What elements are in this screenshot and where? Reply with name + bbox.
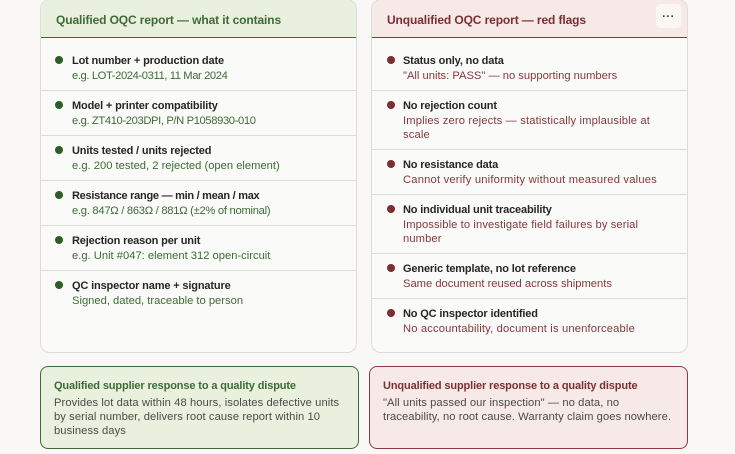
callout: qualified supplier response: Provides lot data within 48 hours, isolates defective units: [54, 397, 339, 409]
item: model: e.g. ZT410-203DPI, P/N P1058930-010: [72, 115, 256, 127]
heading: qualified: Qualified OQC report — what it contains: [56, 13, 281, 27]
item: resistance range: Resistance range — min / mean / max: [72, 190, 259, 202]
item: QC inspector: [41, 270, 356, 315]
item: no rejection count: No rejection count: [403, 100, 497, 112]
callout: qualified supplier response: Qualified supplier response to a quality dispute: [54, 380, 296, 392]
item: units tested: e.g. 200 tested, 2 rejected (open element): [72, 160, 280, 172]
heading: unqualified: Unqualified OQC report — red flags: [387, 13, 586, 27]
item: no traceability: number: [403, 233, 442, 245]
item: lot number: e.g. LOT-2024-0311, 11 Mar 2024: [72, 70, 227, 82]
item: status only: [387, 55, 617, 82]
item: no inspector: No QC inspector identified: [403, 308, 538, 320]
item: units tested: Units tested / units rejected: [72, 145, 211, 157]
callout: qualified supplier response: business days: [54, 425, 126, 437]
item: no inspector: No accountability, document is unenforceable: [403, 323, 635, 335]
callout: unqualified supplier response: "All units passed our inspection" — no data, no: [383, 397, 619, 409]
callout: qualified supplier response: [40, 366, 359, 449]
icon: more options button: [656, 4, 681, 28]
item: model: Model + printer compatibility: [72, 100, 218, 112]
item: rejection reason: e.g. Unit #047: element 312 open-circuit: [72, 250, 270, 262]
heading: unqualified: [372, 0, 687, 38]
panel: unqualified OQC report: [371, 0, 688, 353]
item: status only: Status only, no data: [403, 55, 504, 67]
item: no resistance data: [372, 149, 687, 194]
callout: unqualified supplier response: Unqualified supplier response to a quality dispute: [383, 380, 637, 392]
item: no traceability: [372, 194, 687, 253]
item: units tested: [41, 135, 356, 180]
item: resistance range: e.g. 847Ω / 863Ω / 881Ω (±2% of nominal): [72, 205, 270, 217]
item: no rejection count: scale: [403, 129, 430, 141]
item: generic template: [372, 253, 687, 298]
item: no rejection count: [372, 90, 687, 149]
item: no traceability: No individual unit traceability: [403, 204, 552, 216]
item: no traceability: Impossible to investigate field failures by serial: [403, 219, 638, 231]
item: QC inspector: Signed, dated, traceable to person: [72, 295, 243, 307]
panel: qualified OQC report: [40, 0, 357, 353]
item: no inspector: [372, 298, 687, 343]
callout: unqualified supplier response: [369, 366, 688, 449]
item: rejection reason: Rejection reason per unit: [72, 235, 200, 247]
item: status only: "All units: PASS" — no supporting numbers: [403, 70, 617, 82]
callout: qualified supplier response: by serial number, delivers root cause report within 10: [54, 411, 320, 423]
heading: qualified: [41, 0, 356, 38]
item: no resistance data: No resistance data: [403, 159, 498, 171]
callout: unqualified supplier response: traceability, no root cause. Warranty claim goes nowhere.: [383, 411, 671, 423]
item: QC inspector: QC inspector name + signature: [72, 280, 231, 292]
item: resistance range: [41, 180, 356, 225]
item: lot number: Lot number + production date: [72, 55, 224, 67]
item: lot number: [55, 55, 228, 82]
item: no rejection count: Implies zero rejects — statistically implausible at: [403, 115, 650, 127]
item: model: [41, 90, 356, 135]
item: generic template: Generic template, no lot reference: [403, 263, 576, 275]
item: rejection reason: [41, 225, 356, 270]
item: generic template: Same document reused across shipments: [403, 278, 612, 290]
icon: more options button: ···: [662, 11, 675, 23]
item: no resistance data: Cannot verify uniformity without measured values: [403, 174, 657, 186]
